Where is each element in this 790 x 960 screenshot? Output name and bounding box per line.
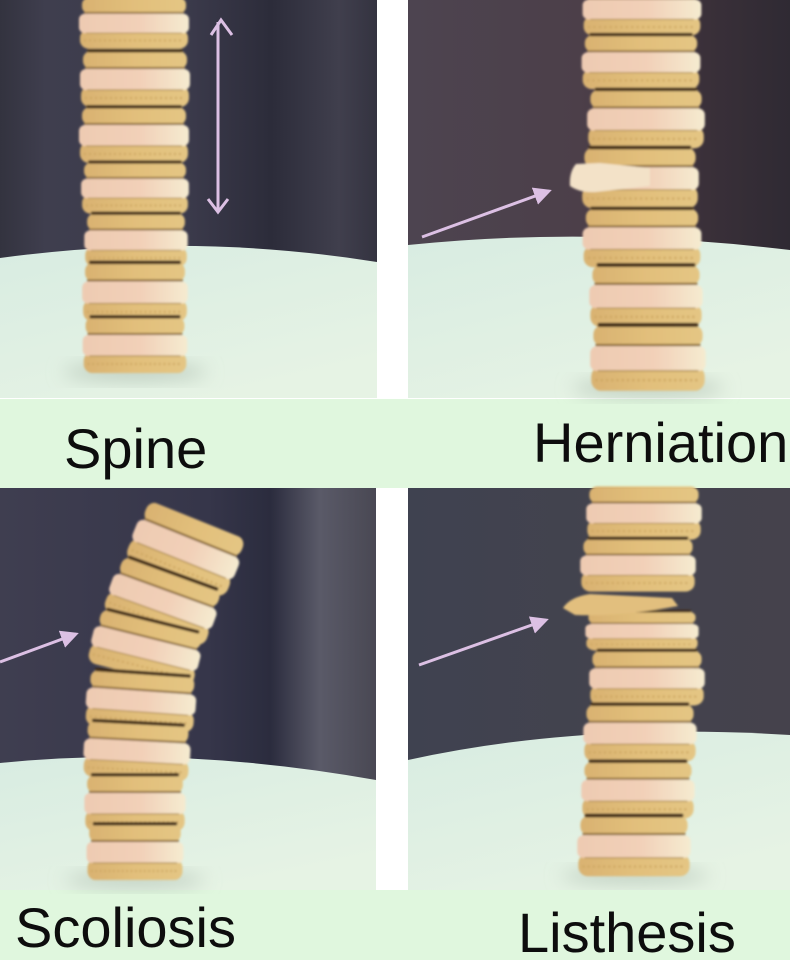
biscuit stack: curved spine: [82, 499, 249, 880]
label: Herniation: Herniation: [533, 411, 788, 474]
slipped biscuit: [563, 594, 678, 615]
panel: listhesis photo: [408, 486, 790, 890]
biscuit stack: herniated disc: [570, 0, 706, 391]
panel: spine photo: [0, 0, 377, 398]
biscuit stack: slipped vertebra: [563, 486, 705, 876]
arrow: pointing to herniation: [422, 191, 549, 237]
arrow: double-headed height arrow: [208, 20, 232, 212]
biscuit stack: straight spine: [79, 0, 190, 373]
label band: bottom: [0, 890, 790, 960]
label: Scoliosis: Scoliosis: [15, 896, 236, 959]
label band: top: [0, 399, 790, 488]
panel: scoliosis photo: [0, 488, 376, 890]
arrow: pointing to curve: [0, 634, 76, 662]
arrow: pointing to slip: [419, 620, 546, 665]
panel: herniation photo: [408, 0, 790, 398]
bulging cream: [570, 163, 650, 192]
label: Spine: Spine: [64, 417, 207, 480]
